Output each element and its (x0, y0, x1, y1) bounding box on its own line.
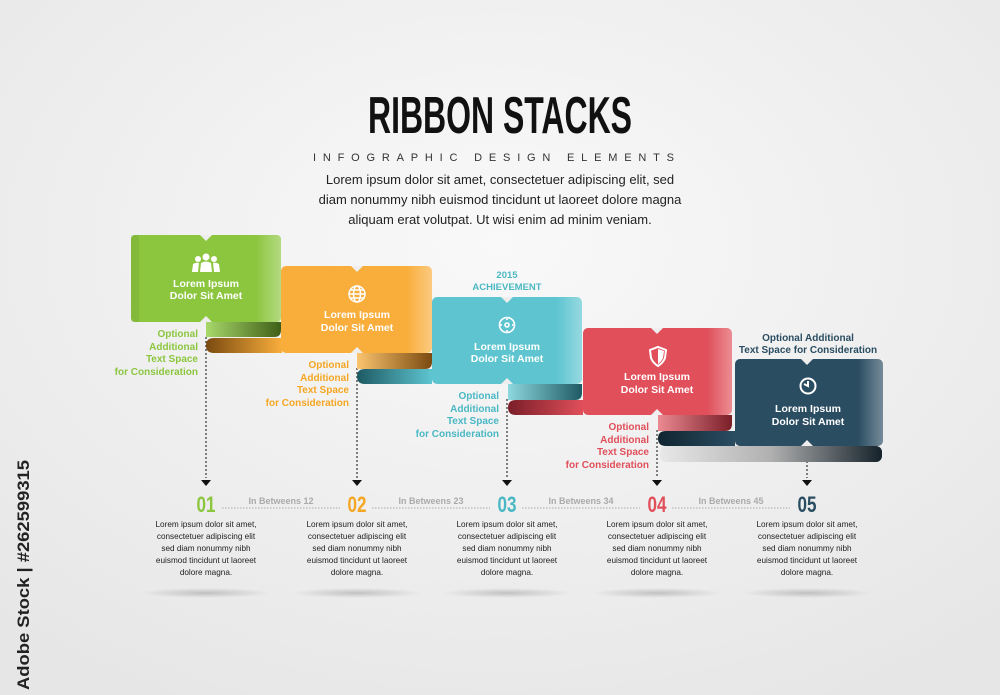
icon: clock (800, 378, 816, 394)
label: teal optional: for Consideration (416, 429, 499, 440)
step numbers: 04 (648, 492, 667, 517)
ribbon 4 red: Dolor Sit Amet (621, 384, 694, 396)
ribbon 1 green: Dolor Sit Amet (170, 290, 243, 302)
ribbon 4 red (508, 328, 732, 431)
ribbon 4 red: Lorem Ipsum (624, 371, 690, 383)
step descriptions: euismod tincidunt ut laoreet (607, 556, 708, 565)
step descriptions: consectetuer adipiscing elit (308, 532, 407, 541)
label: green optional: Text Space (146, 354, 198, 365)
label: 2015 achievement (472, 270, 542, 293)
label: orange optional: for Consideration (266, 398, 349, 409)
step numbers: 05 (798, 492, 816, 517)
ribbon 2 orange (206, 266, 432, 369)
label: 2015 achievement: 2015 (496, 270, 518, 281)
label: red optional: Text Space (597, 447, 649, 458)
step numbers: 03 (498, 492, 516, 517)
step descriptions: sed diam nonummy nibh (312, 544, 402, 553)
ribbon 2 orange: Dolor Sit Amet (321, 322, 394, 334)
label: orange optional: Additional (300, 373, 349, 384)
step descriptions: consectetuer adipiscing elit (608, 532, 707, 541)
floor shadows (141, 588, 872, 598)
step descriptions: consectetuer adipiscing elit (157, 532, 256, 541)
ribbon 3 teal: Lorem Ipsum (474, 341, 540, 353)
in-between dotted lines (222, 507, 790, 509)
step descriptions (155, 520, 858, 577)
icon: people (192, 254, 220, 272)
label: green optional: Additional (149, 342, 198, 353)
step descriptions: Lorem ipsum dolor sit amet, (306, 520, 408, 529)
step descriptions: sed diam nonummy nibh (762, 544, 852, 553)
step descriptions: Lorem ipsum dolor sit amet, (155, 520, 257, 529)
ribbon 2 orange: Lorem Ipsum (324, 309, 390, 321)
in-between labels: In Betweens 45 (698, 496, 764, 506)
step descriptions: dolore magna. (631, 568, 683, 577)
step descriptions: euismod tincidunt ut laoreet (156, 556, 257, 565)
in-between labels (248, 496, 764, 506)
step descriptions: Lorem ipsum dolor sit amet, (606, 520, 708, 529)
step descriptions: Lorem ipsum dolor sit amet, (756, 520, 858, 529)
step descriptions: consectetuer adipiscing elit (758, 532, 857, 541)
arrow heads (201, 480, 812, 486)
dashed connector lines (206, 337, 807, 478)
icon: shield (650, 347, 666, 366)
ribbon 5 navy: Lorem Ipsum (775, 403, 841, 415)
step descriptions: sed diam nonummy nibh (161, 544, 251, 553)
label: orange optional (266, 360, 349, 409)
ribbon 3 teal (357, 297, 582, 400)
icon: compass (499, 317, 515, 333)
label: 2015 achievement: ACHIEVEMENT (472, 282, 542, 293)
label: navy optional: Text Space for Consideration (739, 345, 877, 356)
step descriptions: euismod tincidunt ut laoreet (457, 556, 558, 565)
in-between labels: In Betweens 12 (248, 496, 314, 506)
label: red optional: Additional (600, 435, 649, 446)
label: orange optional: Optional (308, 360, 349, 371)
ribbon 5 navy (658, 359, 883, 462)
step descriptions: dolore magna. (331, 568, 383, 577)
ribbon 5 navy: Dolor Sit Amet (772, 416, 845, 428)
label: red optional: for Consideration (566, 460, 649, 471)
ribbon 1 green (131, 235, 281, 337)
step descriptions: consectetuer adipiscing elit (458, 532, 557, 541)
label: teal optional (416, 391, 499, 440)
intro paragraph (319, 172, 682, 227)
step descriptions: euismod tincidunt ut laoreet (757, 556, 858, 565)
title: RIBBON STACKS (368, 87, 632, 145)
label: orange optional: Text Space (297, 385, 349, 396)
ribbon 3 teal: Dolor Sit Amet (471, 353, 544, 365)
label: red optional: Optional (608, 422, 649, 433)
step descriptions: euismod tincidunt ut laoreet (307, 556, 408, 565)
label: navy optional (739, 333, 877, 356)
intro paragraph: Lorem ipsum dolor sit amet, consectetuer adipiscing elit, sed (326, 172, 674, 187)
intro paragraph: diam nonummy nibh euismod tincidunt ut laoreet dolore magna (319, 192, 682, 207)
step descriptions: dolore magna. (481, 568, 533, 577)
step numbers: 01 (196, 492, 216, 517)
step descriptions: dolore magna. (781, 568, 833, 577)
step descriptions: Lorem ipsum dolor sit amet, (456, 520, 558, 529)
watermark side text: Adobe Stock | #262599315 (14, 460, 33, 690)
icon: globe (349, 286, 365, 302)
intro paragraph: aliquam erat volutpat. Ut wisi enim ad minim veniam. (348, 212, 652, 227)
label: teal optional: Text Space (447, 416, 499, 427)
in-between labels: In Betweens 34 (548, 496, 614, 506)
label: red optional (566, 422, 649, 471)
step descriptions: sed diam nonummy nibh (612, 544, 702, 553)
label: teal optional: Additional (450, 404, 499, 415)
step numbers (196, 492, 816, 517)
label: navy optional: Optional Additional (762, 333, 854, 344)
step numbers: 02 (348, 492, 366, 517)
label: green optional: for Consideration (115, 367, 198, 378)
in-between labels: In Betweens 23 (398, 496, 464, 506)
label: green optional: Optional (157, 329, 198, 340)
label: green optional (115, 329, 198, 378)
step descriptions: dolore magna. (180, 568, 232, 577)
label: teal optional: Optional (458, 391, 499, 402)
subtitle: INFOGRAPHIC DESIGN ELEMENTS (313, 152, 681, 164)
step descriptions: sed diam nonummy nibh (462, 544, 552, 553)
ribbon 1 green: Lorem Ipsum (173, 278, 239, 290)
